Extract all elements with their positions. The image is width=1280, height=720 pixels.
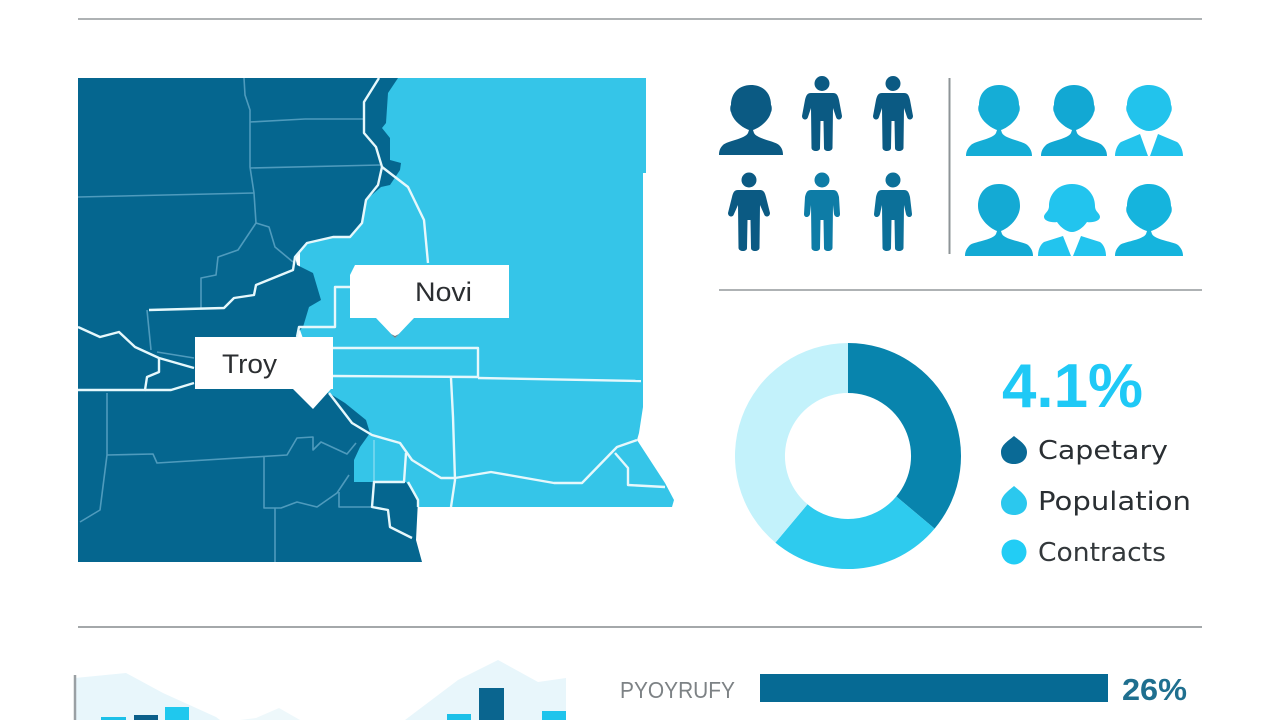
icon: person 2 — [873, 76, 913, 151]
bar — [760, 674, 1108, 702]
callout: Novi — [350, 265, 509, 338]
icon: person 3 — [728, 172, 770, 251]
segment: medium — [775, 496, 935, 569]
bars — [101, 717, 126, 720]
icon: bust 4 — [965, 184, 1033, 256]
icon: person 4 — [804, 172, 840, 251]
icon group: dark people — [719, 76, 913, 251]
horizontal bar row — [620, 672, 1187, 707]
bar label: PYOYRUFY — [620, 677, 735, 703]
icon group: light busts — [965, 85, 1183, 256]
icon: bust 3 with collar — [1115, 85, 1183, 156]
bar value: 26% — [1122, 672, 1187, 707]
icon: bust 1 — [966, 85, 1032, 156]
panel: people icons — [719, 76, 1183, 256]
callout: Troy: Troy — [222, 349, 278, 379]
callout: Novi: Novi — [415, 277, 472, 307]
map: thick white boundaries and rivers — [78, 78, 665, 538]
icon: bust 6 — [1115, 184, 1183, 256]
big stat: 4.1% — [1002, 352, 1143, 421]
icon: person 5 — [874, 172, 912, 251]
legend item: Population — [1001, 486, 1191, 517]
legend item: Population: Population — [1038, 487, 1191, 517]
bar chart: lower left — [75, 660, 566, 720]
segment: light — [735, 343, 848, 543]
chart background area — [75, 673, 220, 720]
map: dark region — [78, 78, 422, 562]
callout: Troy — [195, 337, 333, 409]
map: light region — [300, 78, 674, 507]
panel: regional map — [78, 78, 674, 562]
legend item: Contracts: Contracts — [1038, 538, 1166, 568]
donut chart — [735, 343, 961, 569]
segment: dark — [848, 343, 961, 529]
icon: person 1 — [802, 76, 842, 151]
map: thin county borders — [78, 78, 380, 562]
legend item: Capetary: Capetary — [1038, 436, 1168, 466]
legend — [1001, 436, 1191, 568]
icon: bust 5 female — [1038, 184, 1106, 256]
icon: dark bust — [719, 85, 783, 155]
icon: bust 2 — [1041, 85, 1107, 156]
